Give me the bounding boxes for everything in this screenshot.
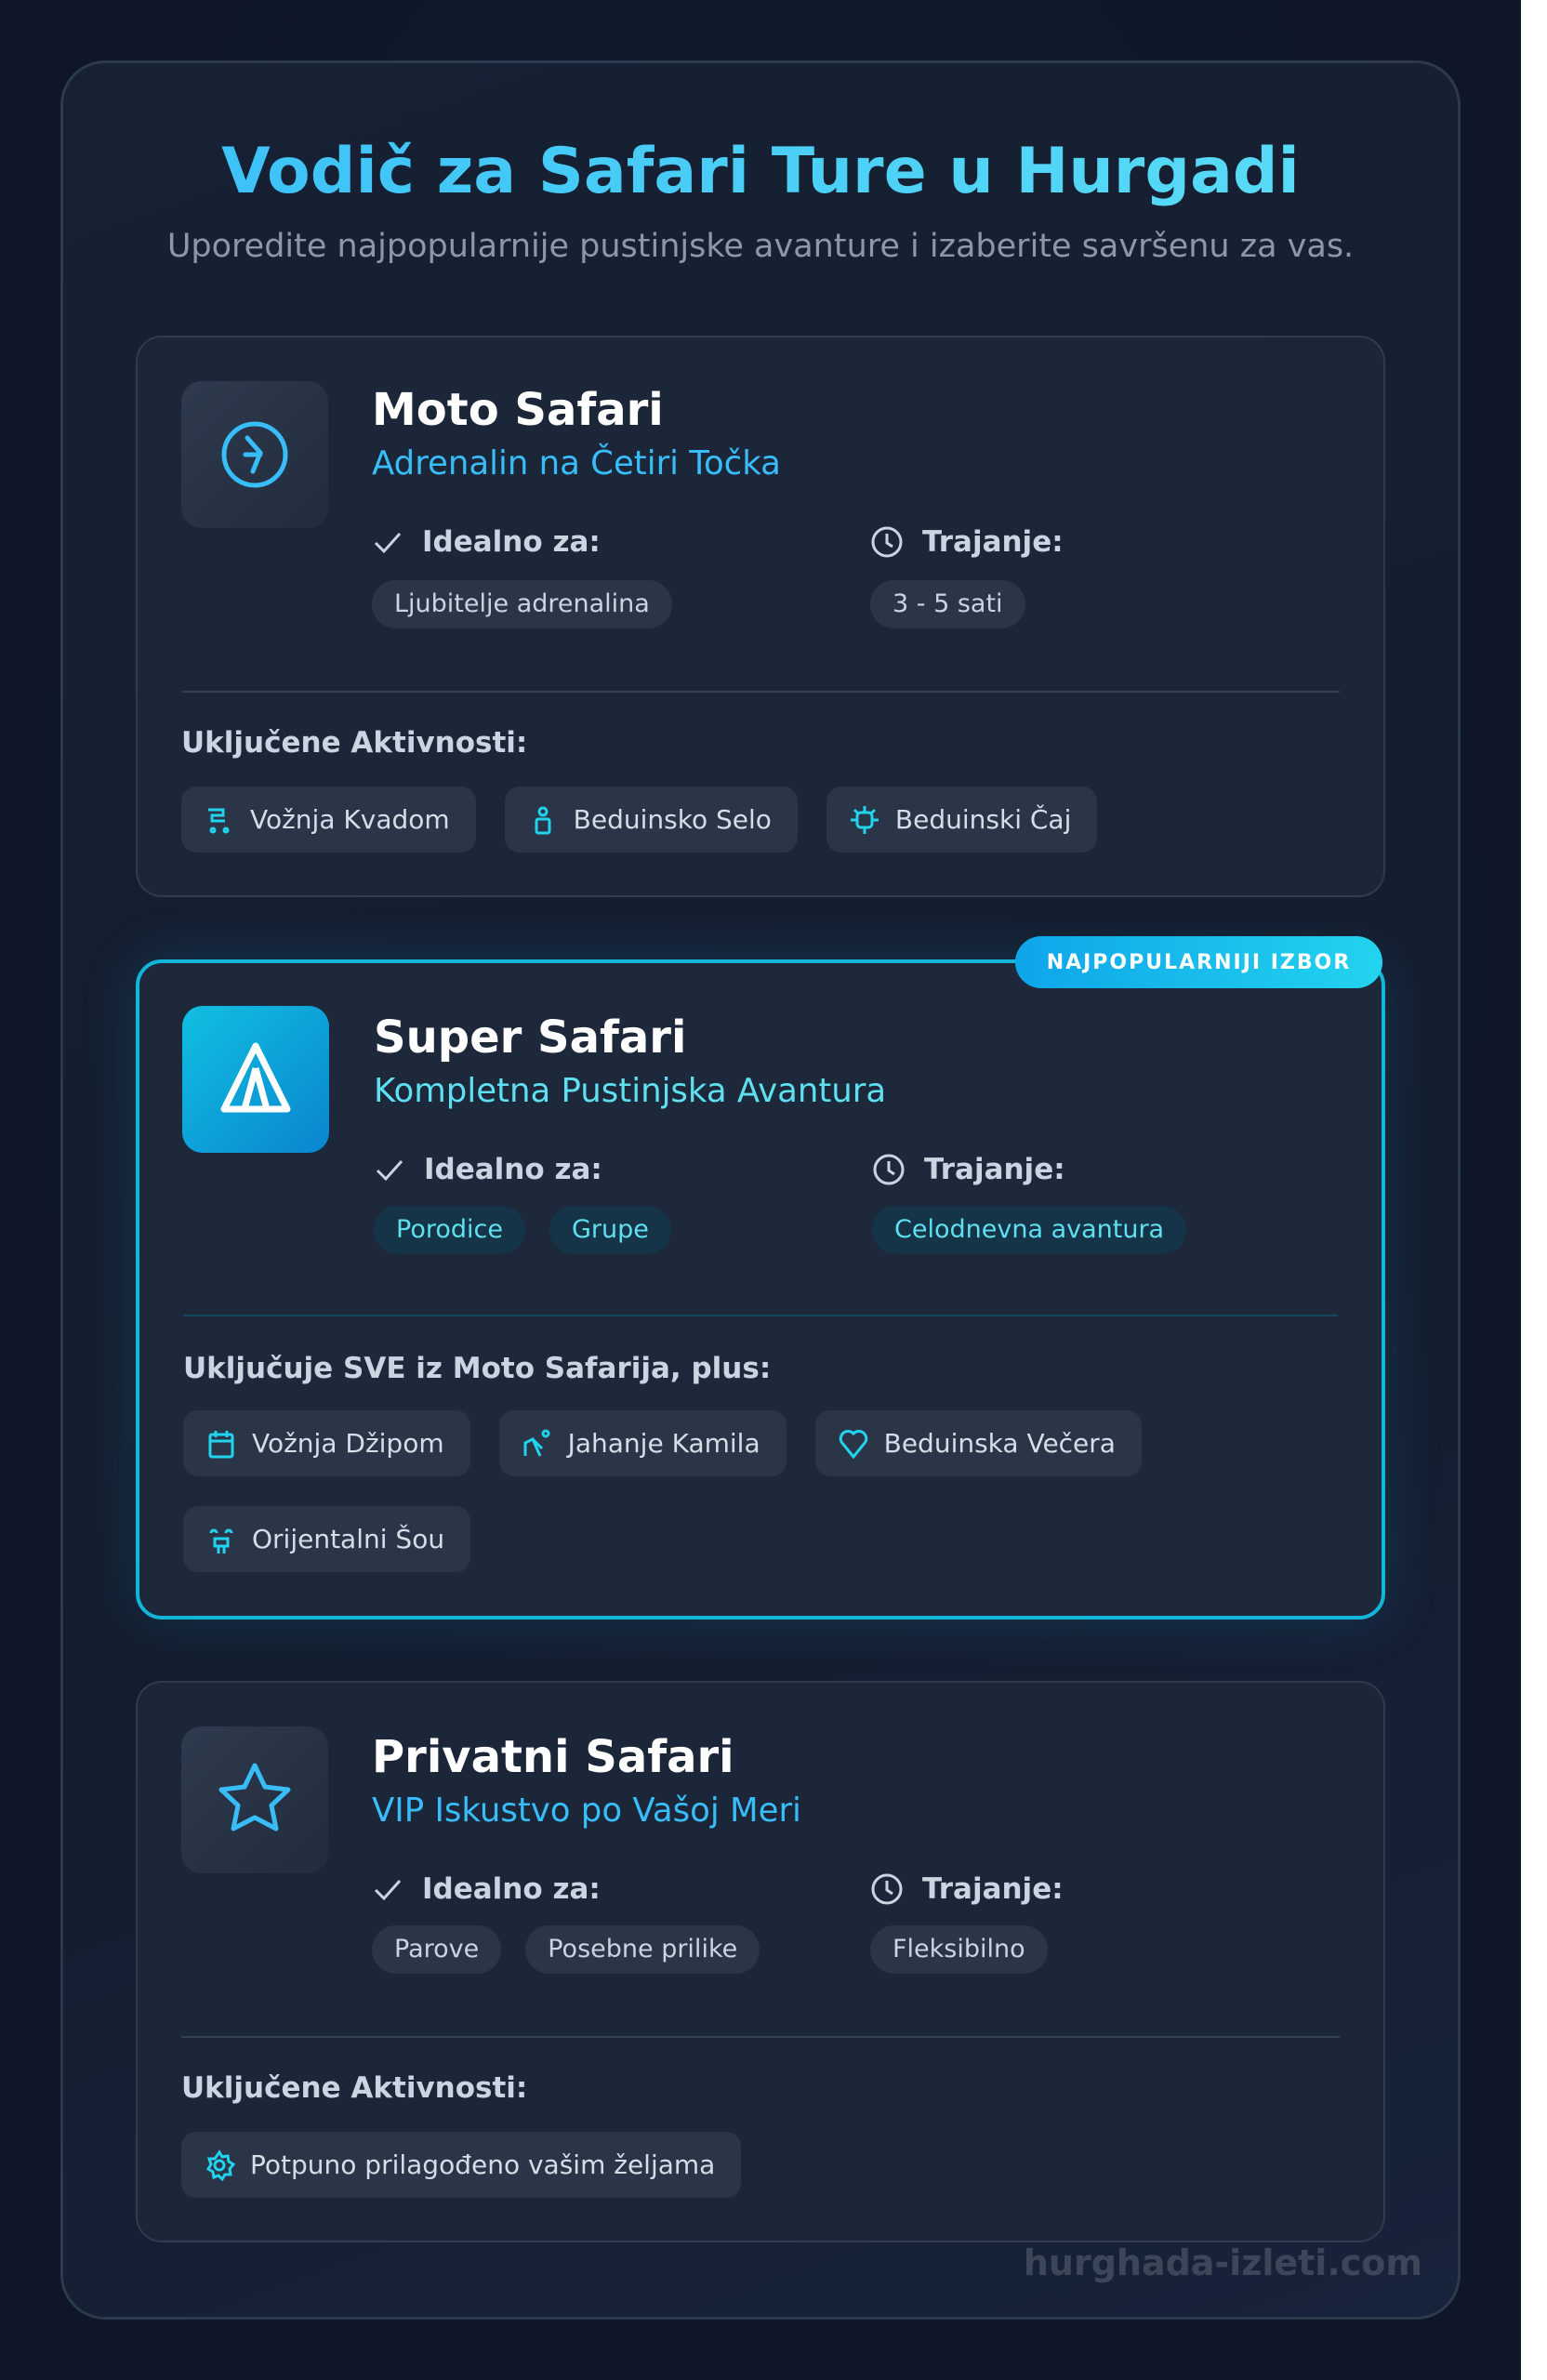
pills: ideal: Ljubitelje adrenalina	[394, 589, 650, 618]
heading: Privatni Safari	[372, 1731, 734, 1783]
pills: ideal	[372, 1925, 760, 1974]
title	[0, 130, 1521, 214]
activities heading: Uključuje SVE iz Moto Safarija, plus:	[183, 1352, 771, 1385]
label: duration: Trajanje:	[922, 1872, 1064, 1906]
activities: Beduinsko Selo	[574, 804, 772, 835]
badge: most popular	[1015, 936, 1382, 988]
tagline: Kompletna Pustinjska Avantura	[374, 1072, 886, 1110]
heading: Moto Safari	[372, 384, 664, 436]
activities	[183, 1410, 1142, 1572]
icon: star	[181, 1726, 328, 1873]
panel: Privatni Safari	[136, 1681, 1385, 2242]
panel: Super Safari	[136, 959, 1385, 1620]
pills: ideal: Porodice	[396, 1215, 503, 1244]
pills: ideal	[374, 1206, 671, 1254]
icon: tent	[182, 1006, 329, 1153]
label: ideal: Idealno za:	[422, 525, 601, 559]
pills: duration: Celodnevna avantura	[894, 1215, 1164, 1244]
activities: Beduinska Večera	[884, 1428, 1116, 1459]
label: ideal: Idealno za:	[422, 1872, 601, 1906]
label: duration: Trajanje:	[922, 525, 1064, 559]
activities heading: Uključene Aktivnosti:	[181, 2071, 527, 2105]
activities: Vožnja Džipom	[252, 1428, 444, 1459]
title: Vodič za Safari Ture u Hurgadi	[221, 135, 1300, 208]
activities	[181, 787, 1097, 853]
pills: duration: 3 - 5 sati	[892, 589, 1003, 618]
tagline: VIP Iskustvo po Vašoj Meri	[372, 1792, 801, 1830]
activities: Beduinski Čaj	[895, 804, 1071, 835]
heading: Super Safari	[374, 1012, 686, 1064]
watermark: hurghada-izleti.com	[1024, 2242, 1422, 2283]
pills: duration: Fleksibilno	[892, 1935, 1025, 1964]
label: duration: Trajanje:	[924, 1153, 1065, 1186]
pills: ideal: Posebne prilike	[548, 1935, 737, 1964]
pills: ideal: Parove	[394, 1935, 479, 1964]
activities: Vožnja Kvadom	[250, 804, 450, 835]
activities heading: Uključene Aktivnosti:	[181, 726, 527, 760]
pills: ideal: Grupe	[572, 1215, 649, 1244]
activities: Orijentalni Šou	[252, 1524, 444, 1554]
subtitle: Uporedite najpopularnije pustinjske avanture i izaberite savršenu za vas.	[167, 228, 1354, 265]
tagline: Adrenalin na Četiri Točka	[372, 444, 781, 483]
activities: Jahanje Kamila	[568, 1428, 760, 1459]
activities: Potpuno prilagođeno vašim željama	[250, 2149, 715, 2180]
activities	[181, 2132, 741, 2198]
label: ideal: Idealno za:	[424, 1153, 602, 1186]
panel: Moto Safari	[136, 336, 1385, 897]
badge: most popular: NAJPOPULARNIJI IZBOR	[1047, 950, 1351, 974]
icon: moto	[181, 381, 328, 528]
